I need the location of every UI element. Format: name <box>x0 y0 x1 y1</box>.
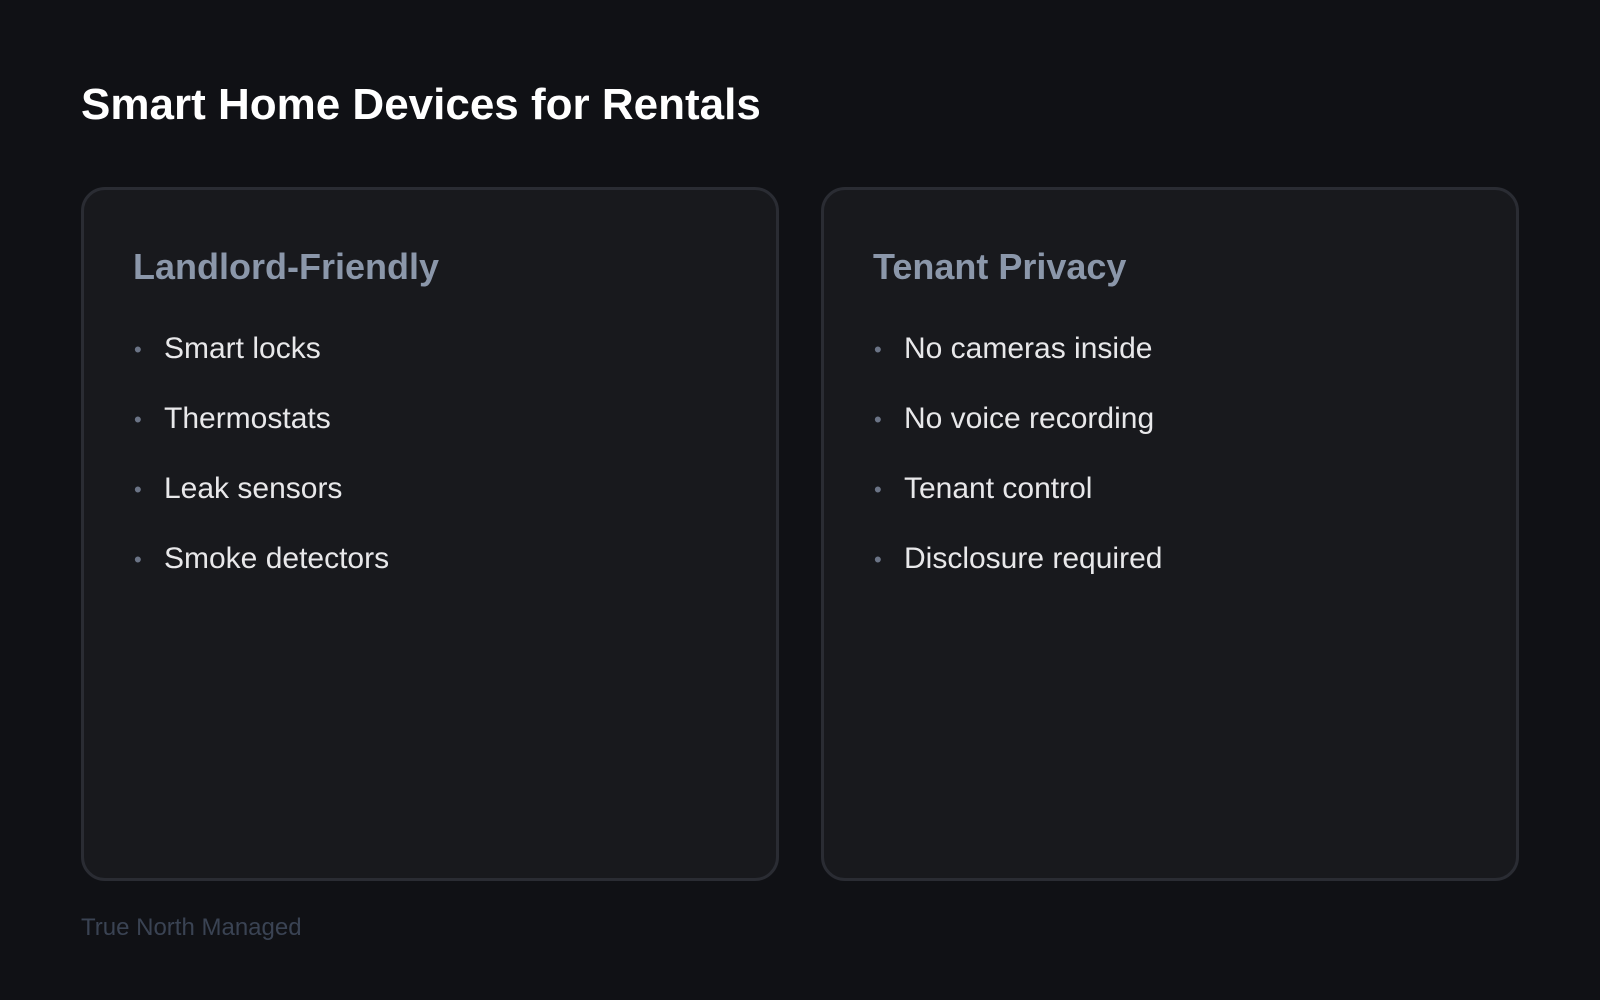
list: privacy rules: • <box>874 477 882 502</box>
panel: tenant privacy <box>821 187 1519 881</box>
list: privacy rules: • <box>874 407 882 432</box>
list: landlord devices: • <box>134 547 142 572</box>
list: landlord devices: Smart locks <box>164 332 321 365</box>
list: landlord devices: • <box>134 407 142 432</box>
panel: landlord-friendly <box>81 187 779 881</box>
list: privacy rules <box>874 332 1162 575</box>
list: privacy rules: Disclosure required <box>904 542 1162 575</box>
footer: True North Managed <box>81 914 302 941</box>
list: privacy rules: • <box>874 547 882 572</box>
list: landlord devices: • <box>134 477 142 502</box>
list: landlord devices: Leak sensors <box>164 472 342 505</box>
list: privacy rules: • <box>874 337 882 362</box>
list: landlord devices: • <box>134 337 142 362</box>
list: landlord devices: Thermostats <box>164 402 331 435</box>
title: Smart Home Devices for Rentals <box>81 80 761 129</box>
list: privacy rules: No cameras inside <box>904 332 1152 365</box>
heading: tenant privacy: Tenant Privacy <box>873 246 1126 287</box>
list: privacy rules: No voice recording <box>904 402 1154 435</box>
heading: landlord-friendly: Landlord-Friendly <box>133 246 439 287</box>
list: privacy rules: Tenant control <box>904 472 1092 505</box>
list: landlord devices: Smoke detectors <box>164 542 389 575</box>
list: landlord devices <box>134 332 389 575</box>
